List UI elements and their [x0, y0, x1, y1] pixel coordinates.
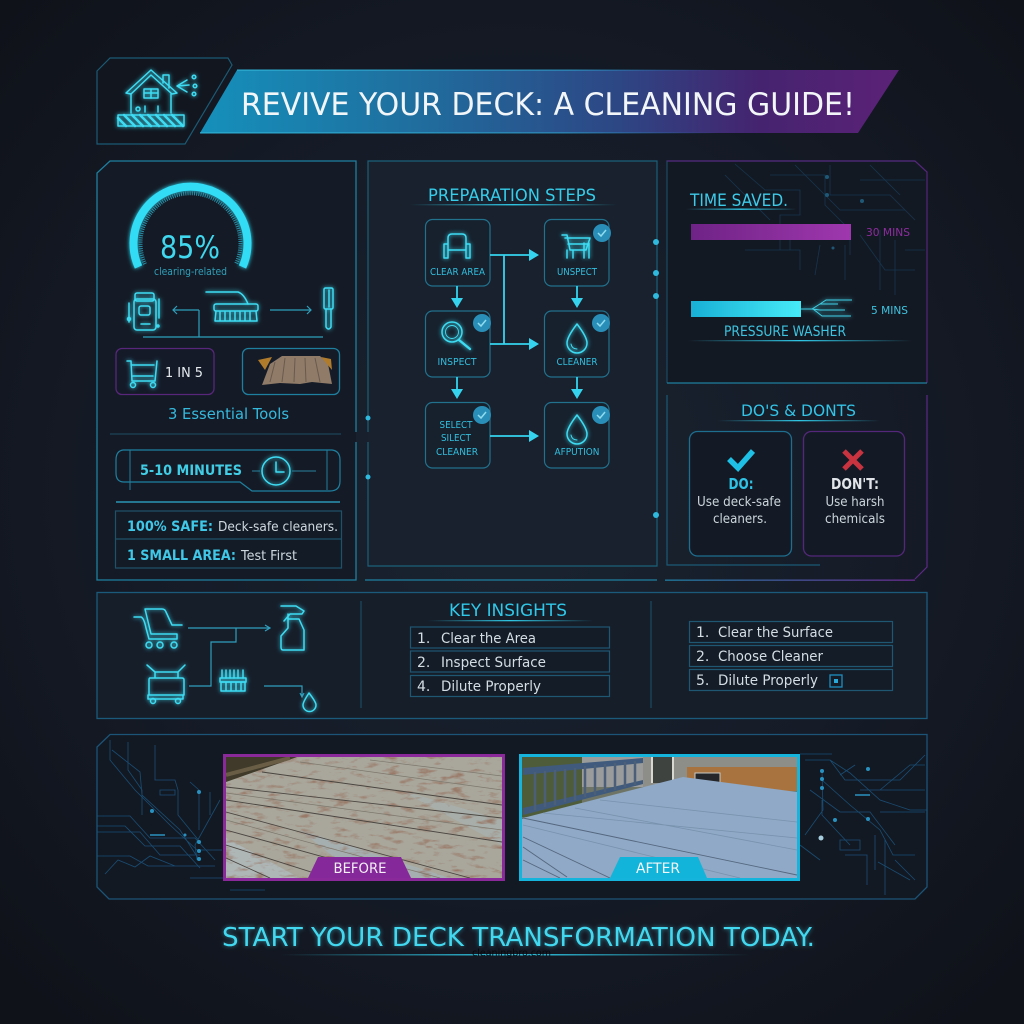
heading: DO'S & DONTS [741, 401, 856, 420]
step: select cleaner [426, 402, 491, 468]
safety table: Deck-safe cleaners. [218, 520, 338, 535]
panel: key insights [97, 592, 927, 718]
caption: 3 essential tools: 3 Essential Tools [168, 405, 289, 423]
step: unspect [544, 220, 611, 286]
bar: 5 mins [691, 300, 908, 317]
icon: narrow brush [324, 288, 333, 329]
list: insights [410, 627, 610, 696]
bar: 30 mins: 30 MINS [866, 226, 910, 239]
list: steps: Clear the Surface [718, 625, 833, 641]
list: insights: Dilute Properly [441, 679, 541, 695]
icon: cart [134, 609, 182, 648]
watermark: cleaningbro.com [472, 948, 551, 959]
don't card: DON'T: [831, 475, 879, 493]
step: application [544, 402, 610, 468]
icon: cross [844, 451, 862, 469]
panel: preparation steps [365, 161, 659, 580]
stat: 1 in 5: 1 IN 5 [165, 366, 203, 381]
circuit decoration left [97, 740, 265, 890]
icon: cart with basket [147, 665, 185, 704]
step: clear area [426, 220, 490, 286]
list: insights: 2. [417, 655, 430, 671]
list: insights: 1. [417, 631, 430, 647]
panel: before and after [97, 734, 927, 899]
do card: cleaners. [713, 512, 767, 527]
list: insights: Inspect Surface [441, 655, 546, 671]
icon: spray bottle [281, 606, 304, 650]
tools diagram [128, 288, 333, 337]
check badge [473, 406, 491, 424]
safety table: 1 SMALL AREA: [127, 548, 236, 564]
flow arrows [451, 249, 583, 442]
heading: TIME SAVED. [689, 191, 788, 211]
icon: scrub pad [220, 670, 246, 691]
icon: house with sprayer [118, 70, 197, 126]
after photo [520, 756, 798, 880]
panel: do's and don'ts [665, 395, 927, 581]
check badge [593, 224, 611, 242]
list: insights: 4. [417, 679, 430, 695]
list: steps [690, 622, 892, 690]
don't card: chemicals [825, 512, 885, 527]
panel: time saved [667, 161, 927, 383]
don't card [804, 432, 904, 556]
list: steps: 1. [696, 625, 709, 641]
heading: key insights: KEY INSIGHTS [449, 601, 567, 621]
before label: BEFORE [334, 861, 386, 877]
list: steps: Choose Cleaner [718, 649, 823, 665]
panel: key stats [97, 161, 356, 580]
icon: small square [830, 675, 842, 687]
icon: pressure washer [128, 293, 159, 330]
icon: clock [262, 457, 290, 485]
icon: water drop [303, 693, 316, 712]
list: steps: 2. [696, 649, 709, 665]
list: insights: Clear the Area [441, 631, 536, 647]
do card [690, 432, 792, 556]
safety table [116, 511, 342, 568]
step: application: AFPUTION [554, 447, 600, 458]
check badge [592, 406, 610, 424]
gauge: 85%: 85% [160, 230, 220, 266]
circuit decoration right [800, 754, 927, 895]
title banner [200, 70, 899, 134]
heading: PREPARATION STEPS [428, 186, 596, 206]
list: steps: Dilute Properly [718, 673, 818, 689]
gauge: 85% [134, 187, 248, 278]
icon: check [729, 451, 753, 468]
step: cleaner [544, 311, 610, 377]
stat: deck thumbnail [242, 348, 340, 394]
step: inspect [426, 311, 491, 377]
bar: 30 mins [691, 224, 910, 240]
step: select cleaner: SILECT [441, 433, 472, 444]
step: select cleaner: SELECT [440, 420, 473, 431]
after label: AFTER [636, 861, 680, 877]
time badge [116, 450, 340, 491]
safety table: Test First [240, 549, 297, 564]
arrows [143, 306, 323, 337]
do card: DO: [728, 475, 754, 493]
bar: 5 mins: 5 MINS [871, 304, 908, 317]
stat: 1 in 5 [116, 348, 214, 394]
connectors [188, 625, 304, 697]
circuit decoration [725, 164, 925, 295]
step: select cleaner: CLEANER [436, 447, 478, 458]
label: pressure washer: PRESSURE WASHER [724, 324, 846, 340]
before photo [224, 756, 504, 880]
time badge: 5-10 MINUTES [140, 463, 242, 479]
do card: Use deck-safe [697, 495, 781, 510]
call to action: START YOUR DECK TRANSFORMATION TODAY. [222, 923, 815, 953]
check badge [592, 314, 610, 332]
step: inspect: INSPECT [438, 357, 477, 368]
tools flow icons [134, 606, 316, 712]
step: cleaner: CLEANER [556, 357, 598, 368]
don't card: Use harsh [826, 495, 884, 510]
after label [610, 857, 707, 878]
before label [308, 857, 411, 878]
title: REVIVE YOUR DECK: A CLEANING GUIDE! [241, 87, 855, 123]
gauge: 85%: clearing-related [154, 266, 227, 278]
step: clear area: CLEAR AREA [430, 267, 485, 278]
list: steps: 5. [696, 673, 709, 689]
icon: scrub brush [206, 292, 258, 321]
check badge [473, 314, 491, 332]
step: unspect: UNSPECT [557, 267, 598, 278]
safety table: 100% SAFE: [127, 519, 213, 535]
header icon panel [97, 58, 232, 144]
